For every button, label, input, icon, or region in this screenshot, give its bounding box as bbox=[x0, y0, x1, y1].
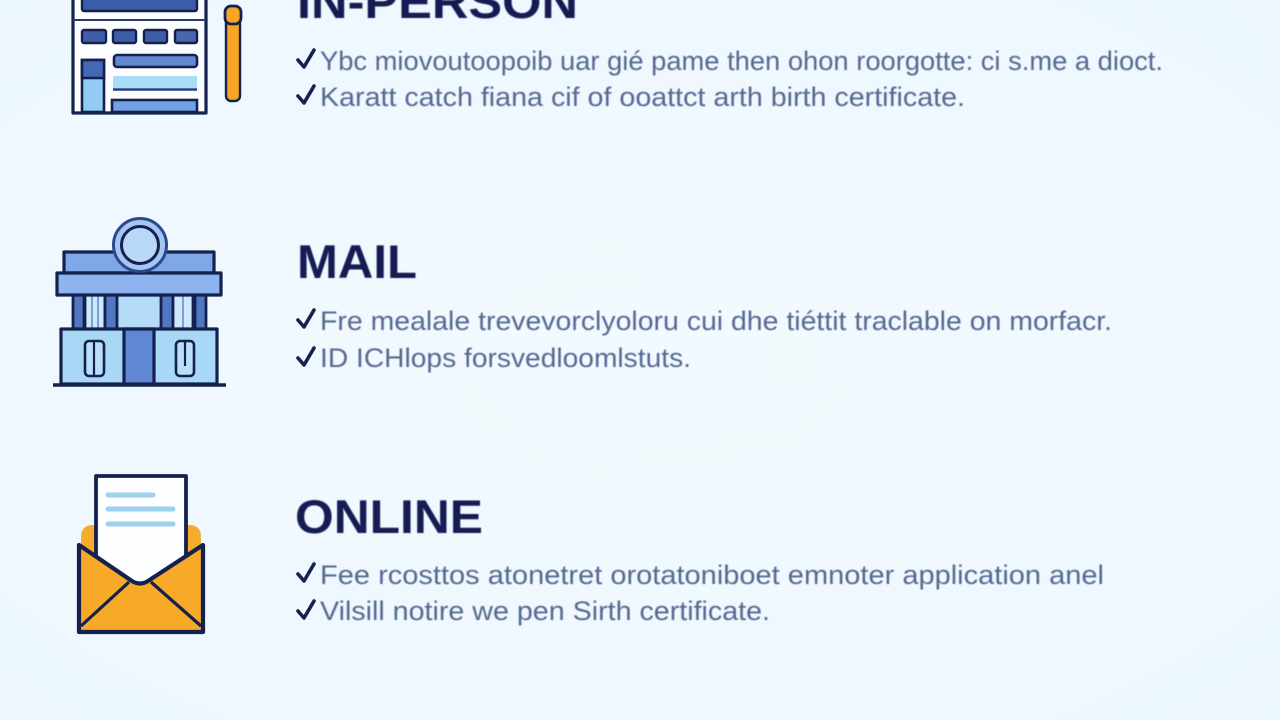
mail list line 2: ID ICHlops forsvedloomlstuts. bbox=[320, 343, 691, 373]
heading: online: ONLINE bbox=[295, 490, 483, 543]
icon: government building bbox=[53, 218, 226, 385]
icon: open envelope with letter bbox=[79, 476, 203, 632]
in-person list line 2: Karatt catch fiana cif of ooattct arth birth certificate. bbox=[320, 82, 965, 112]
in-person list line 1: Ybc miovoutoopoib uar gié pame then ohon roorgotte: ci s.me a dioct. bbox=[320, 46, 1163, 76]
mail list line 1: Fre mealale trevevorclyoloru cui dhe tiéttit traclable on morfacr. bbox=[320, 306, 1112, 336]
heading: mail: MAIL bbox=[297, 235, 417, 288]
icon: application form with pencil bbox=[73, 0, 241, 113]
online list line 1: Fee rcosttos atonetret orotatoniboet emnoter application anel bbox=[320, 560, 1104, 590]
online list line 2: Vilsill notire we pen Sirth certificate. bbox=[320, 596, 770, 626]
